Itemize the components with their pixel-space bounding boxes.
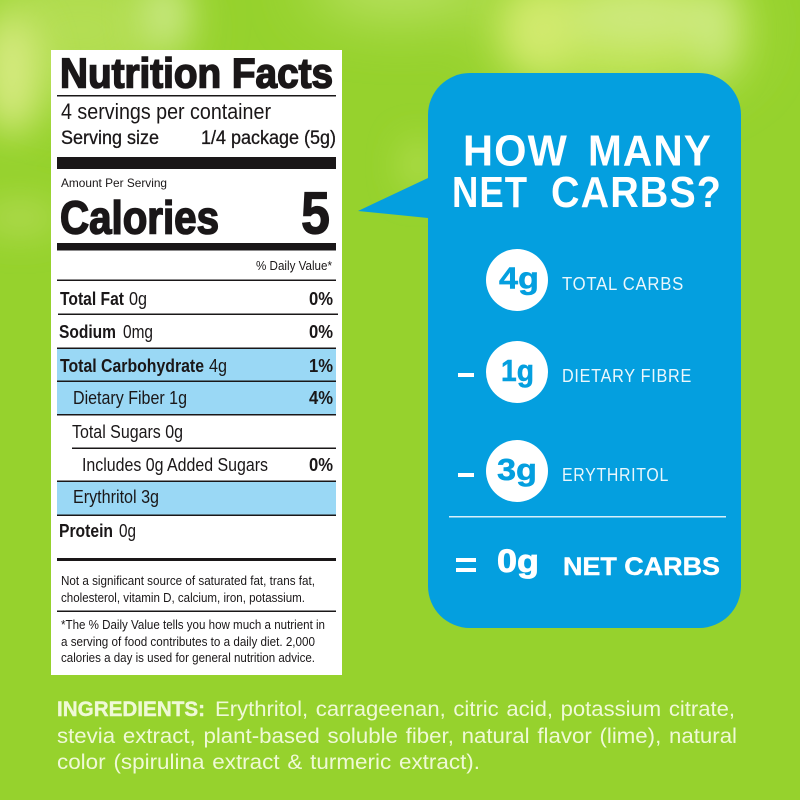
row: protein: 0g bbox=[119, 521, 136, 541]
heading: how many net carbs: HOW bbox=[463, 126, 568, 176]
row: total carbohydrate: 4g bbox=[209, 356, 227, 376]
note: daily value footnote: calories a day is used for general nutrition advice. bbox=[61, 650, 315, 665]
heading: how many net carbs: MANY bbox=[588, 126, 712, 176]
ingredients text: stevia extract, plant-based soluble fiber, natural flavor (lime), natural bbox=[57, 725, 737, 748]
note: daily value footnote: *The % Daily Value tells you how much a nutrient in bbox=[61, 617, 325, 632]
ingredients text: color (spirulina extract & turmeric extract). bbox=[57, 751, 480, 774]
row: dietary fiber: 4% bbox=[309, 388, 333, 408]
row: sodium: Sodium bbox=[59, 322, 116, 342]
note: not a significant source: cholesterol, vitamin D, calcium, iron, potassium. bbox=[61, 590, 305, 605]
step: minus 1g dietary fibre: DIETARY FIBRE bbox=[562, 366, 692, 386]
row: added sugars: 0% bbox=[309, 455, 333, 475]
step: minus 3g erythritol: 3g bbox=[497, 452, 537, 487]
row: sodium: 0mg bbox=[123, 322, 153, 342]
note: daily value footnote: a serving of food contributes to a daily diet. 2,000 bbox=[61, 634, 315, 649]
panel: nutrition facts label bbox=[51, 50, 342, 675]
step: 4g total carbs: TOTAL CARBS bbox=[562, 274, 684, 294]
step: 4g total carbs: 4g bbox=[499, 260, 539, 296]
row: total fat: 0% bbox=[309, 289, 333, 309]
result: equals 0g net carbs: 0g bbox=[497, 543, 539, 579]
row: total fat bbox=[60, 289, 333, 309]
result: equals 0g net carbs: NET CARBS bbox=[563, 553, 720, 581]
row: total fat: 0g bbox=[129, 289, 147, 309]
heading: how many net carbs bbox=[452, 126, 722, 217]
step: minus 1g dietary fibre: 1g bbox=[501, 353, 534, 388]
note: not a significant source bbox=[61, 573, 315, 605]
calories row: 5 bbox=[301, 180, 330, 246]
row: total carbohydrate: 1% bbox=[309, 356, 333, 376]
row: sodium bbox=[59, 322, 333, 342]
serving size bbox=[61, 128, 336, 149]
heading: how many net carbs: NET bbox=[452, 168, 528, 217]
row: total fat: Total Fat bbox=[60, 289, 124, 309]
step: minus 3g erythritol bbox=[458, 440, 669, 502]
row: added sugars: Includes 0g Added Sugars bbox=[82, 455, 268, 475]
note: not a significant source: Not a significant source of saturated fat, trans fat, bbox=[61, 573, 315, 588]
step: minus 1g dietary fibre bbox=[458, 341, 692, 403]
panel: net carbs speech bubble bbox=[358, 73, 741, 628]
row: protein: Protein bbox=[59, 521, 113, 541]
row: dietary fiber: Dietary Fiber 1g bbox=[73, 388, 187, 408]
row: total carbohydrate bbox=[60, 356, 333, 376]
amount per serving: Amount Per Serving bbox=[61, 176, 167, 190]
step: 4g total carbs bbox=[486, 249, 684, 311]
result: equals 0g net carbs bbox=[456, 543, 720, 581]
daily value header: % Daily Value* bbox=[256, 259, 332, 273]
row: total sugars: Total Sugars 0g bbox=[72, 422, 183, 442]
heading: Nutrition Facts: Nutrition Facts bbox=[60, 50, 333, 96]
ingredients text: INGREDIENTS: bbox=[57, 698, 205, 721]
row: sodium: 0% bbox=[309, 322, 333, 342]
serving size: Serving size bbox=[61, 128, 159, 149]
calories row: Calories bbox=[60, 192, 219, 244]
servings per container: 4 servings per container bbox=[61, 99, 271, 124]
row: dietary fiber bbox=[73, 388, 333, 408]
row: total carbohydrate: Total Carbohydrate bbox=[60, 356, 204, 376]
heading: how many net carbs: CARBS? bbox=[551, 168, 722, 217]
ingredients text: Erythritol, carrageenan, citric acid, potassium citrate, bbox=[215, 698, 735, 721]
row: erythritol: Erythritol 3g bbox=[73, 487, 159, 507]
note: daily value footnote bbox=[61, 617, 325, 665]
step: minus 3g erythritol: ERYTHRITOL bbox=[562, 465, 669, 485]
ingredients text bbox=[57, 698, 737, 774]
serving size: 1/4 package (5g) bbox=[201, 128, 336, 149]
calories row bbox=[60, 180, 330, 246]
